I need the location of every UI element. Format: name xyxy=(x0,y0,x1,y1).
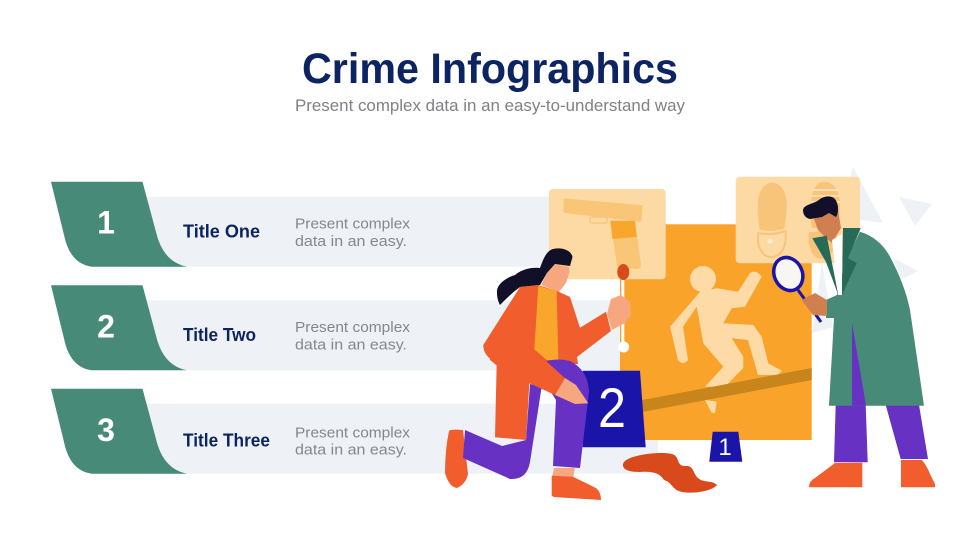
title: Crime Infographics xyxy=(302,45,678,93)
magnifying glass xyxy=(768,253,821,322)
hand holding swab xyxy=(607,295,631,330)
hair xyxy=(803,196,838,219)
row 2 description: Present complex xyxy=(295,319,411,336)
panel: row 2 xyxy=(51,285,658,370)
icon: gun card xyxy=(549,189,666,279)
row 3 description: data in an easy. xyxy=(295,442,407,459)
rear shoe xyxy=(445,430,468,488)
icon: evidence marker 2: 2 xyxy=(598,376,626,439)
hand xyxy=(802,293,827,316)
illustration: kneeling woman xyxy=(445,248,631,500)
coat sleeve xyxy=(490,335,565,395)
icon: footprints card xyxy=(736,177,860,263)
yellow scarf xyxy=(534,286,558,360)
row 1 number: 1 xyxy=(97,204,115,240)
shoes xyxy=(809,463,862,487)
shirt xyxy=(832,234,842,295)
hand on knee xyxy=(555,378,588,404)
coat opening xyxy=(852,323,866,406)
icon: chalk body outline xyxy=(670,266,782,413)
left lapel xyxy=(812,236,838,295)
row 3 description: Present complex xyxy=(295,424,411,441)
subtitle: Present complex data in an easy-to-understand way xyxy=(295,96,685,115)
decorative triangles xyxy=(812,167,932,333)
green coat xyxy=(826,232,924,406)
purple trousers xyxy=(834,405,868,462)
police tape xyxy=(640,368,812,412)
row 1 heading: Title One xyxy=(183,222,260,242)
row 3 number: 3 xyxy=(97,412,115,448)
hair xyxy=(497,248,572,305)
icon: evidence marker 1 xyxy=(709,432,742,462)
row 3 heading: Title Three xyxy=(183,430,270,450)
panel: crime scene board xyxy=(620,224,812,440)
row 1 description: data in an easy. xyxy=(295,233,407,250)
orange coat body xyxy=(483,285,611,440)
row 1 green tab xyxy=(51,182,187,267)
face and neck xyxy=(541,264,570,292)
row 2 band xyxy=(130,300,658,370)
row 3 green tab xyxy=(51,389,187,474)
icon: evidence marker 2 xyxy=(583,371,646,447)
illustration: detective man xyxy=(768,196,935,487)
row 2 heading: Title Two xyxy=(183,325,256,345)
front shoe xyxy=(552,468,575,478)
panel: row 1 xyxy=(51,182,658,267)
row 2 green tab xyxy=(51,285,187,370)
right lapel xyxy=(842,228,861,295)
row 2 number: 2 xyxy=(97,308,115,344)
swab xyxy=(617,264,629,352)
row 3 band xyxy=(130,404,658,474)
row 1 band xyxy=(130,197,658,267)
row 2 description: data in an easy. xyxy=(295,336,407,353)
neck and face xyxy=(813,210,841,243)
icon: blood stain xyxy=(623,453,717,493)
rear trouser leg xyxy=(463,384,542,479)
icon: evidence marker 1: 1 xyxy=(718,434,732,461)
front trouser leg xyxy=(540,360,589,468)
row 1 description: Present complex xyxy=(295,216,411,232)
panel: row 3 xyxy=(51,389,658,474)
